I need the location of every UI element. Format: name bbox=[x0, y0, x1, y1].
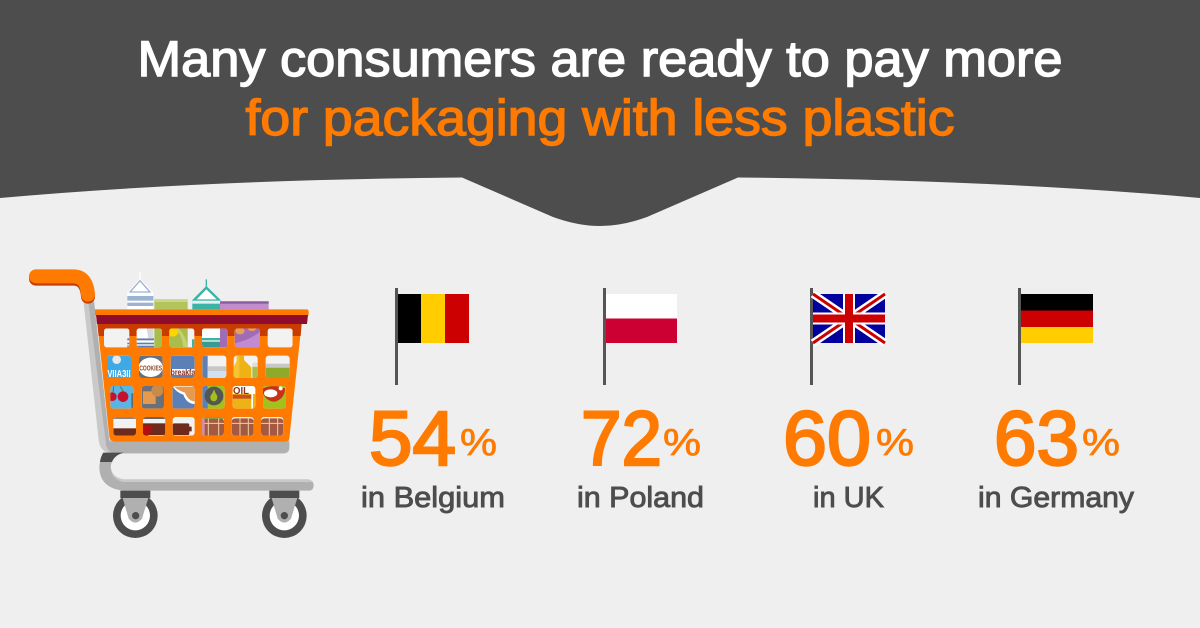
flag: Germany bbox=[1018, 288, 1093, 385]
flag: UK bbox=[810, 288, 885, 385]
label: in Poland: in Poland bbox=[577, 482, 704, 514]
header banner bbox=[0, 0, 1200, 226]
basket window contents: COOKIES bbox=[139, 363, 162, 372]
title bbox=[138, 31, 1062, 146]
value: 72%: 72 bbox=[581, 396, 662, 482]
value: 54%: % bbox=[460, 422, 497, 464]
value: 60% bbox=[783, 396, 914, 482]
basket window contents: breakfast bbox=[171, 367, 202, 377]
value: 60%: % bbox=[876, 422, 914, 464]
icon: shopping cart bbox=[36, 272, 314, 538]
label: in Germany: in Germany bbox=[978, 482, 1135, 514]
basket window contents: OIL bbox=[233, 386, 249, 397]
value: 63% bbox=[994, 396, 1120, 482]
stat: Poland bbox=[577, 288, 704, 514]
stat: UK bbox=[783, 288, 914, 514]
value: 63%: 63 bbox=[994, 396, 1079, 482]
cart frame bbox=[83, 300, 314, 491]
label: in UK: in UK bbox=[813, 482, 885, 514]
flag: Belgium bbox=[395, 288, 469, 385]
cart handle bbox=[36, 276, 88, 297]
flag: Poland bbox=[603, 288, 677, 385]
stat: Belgium bbox=[361, 288, 505, 514]
orange basket bbox=[95, 309, 309, 442]
value: 54%: 54 bbox=[369, 396, 456, 482]
title: for packaging with less plastic bbox=[246, 90, 954, 146]
products above the basket bbox=[127, 272, 269, 309]
rear wheel bbox=[262, 491, 307, 538]
value: 63%: % bbox=[1082, 422, 1120, 464]
value: 54% bbox=[369, 396, 497, 482]
stat: Germany bbox=[978, 288, 1135, 514]
basket window contents bbox=[104, 328, 293, 436]
value: 60%: 60 bbox=[783, 396, 871, 482]
value: 72%: % bbox=[663, 422, 701, 464]
title: Many consumers are ready to pay more bbox=[138, 31, 1062, 87]
label: in Belgium: in Belgium bbox=[361, 482, 505, 514]
front wheel bbox=[113, 491, 158, 538]
basket window contents: VIIA3II bbox=[107, 369, 131, 380]
